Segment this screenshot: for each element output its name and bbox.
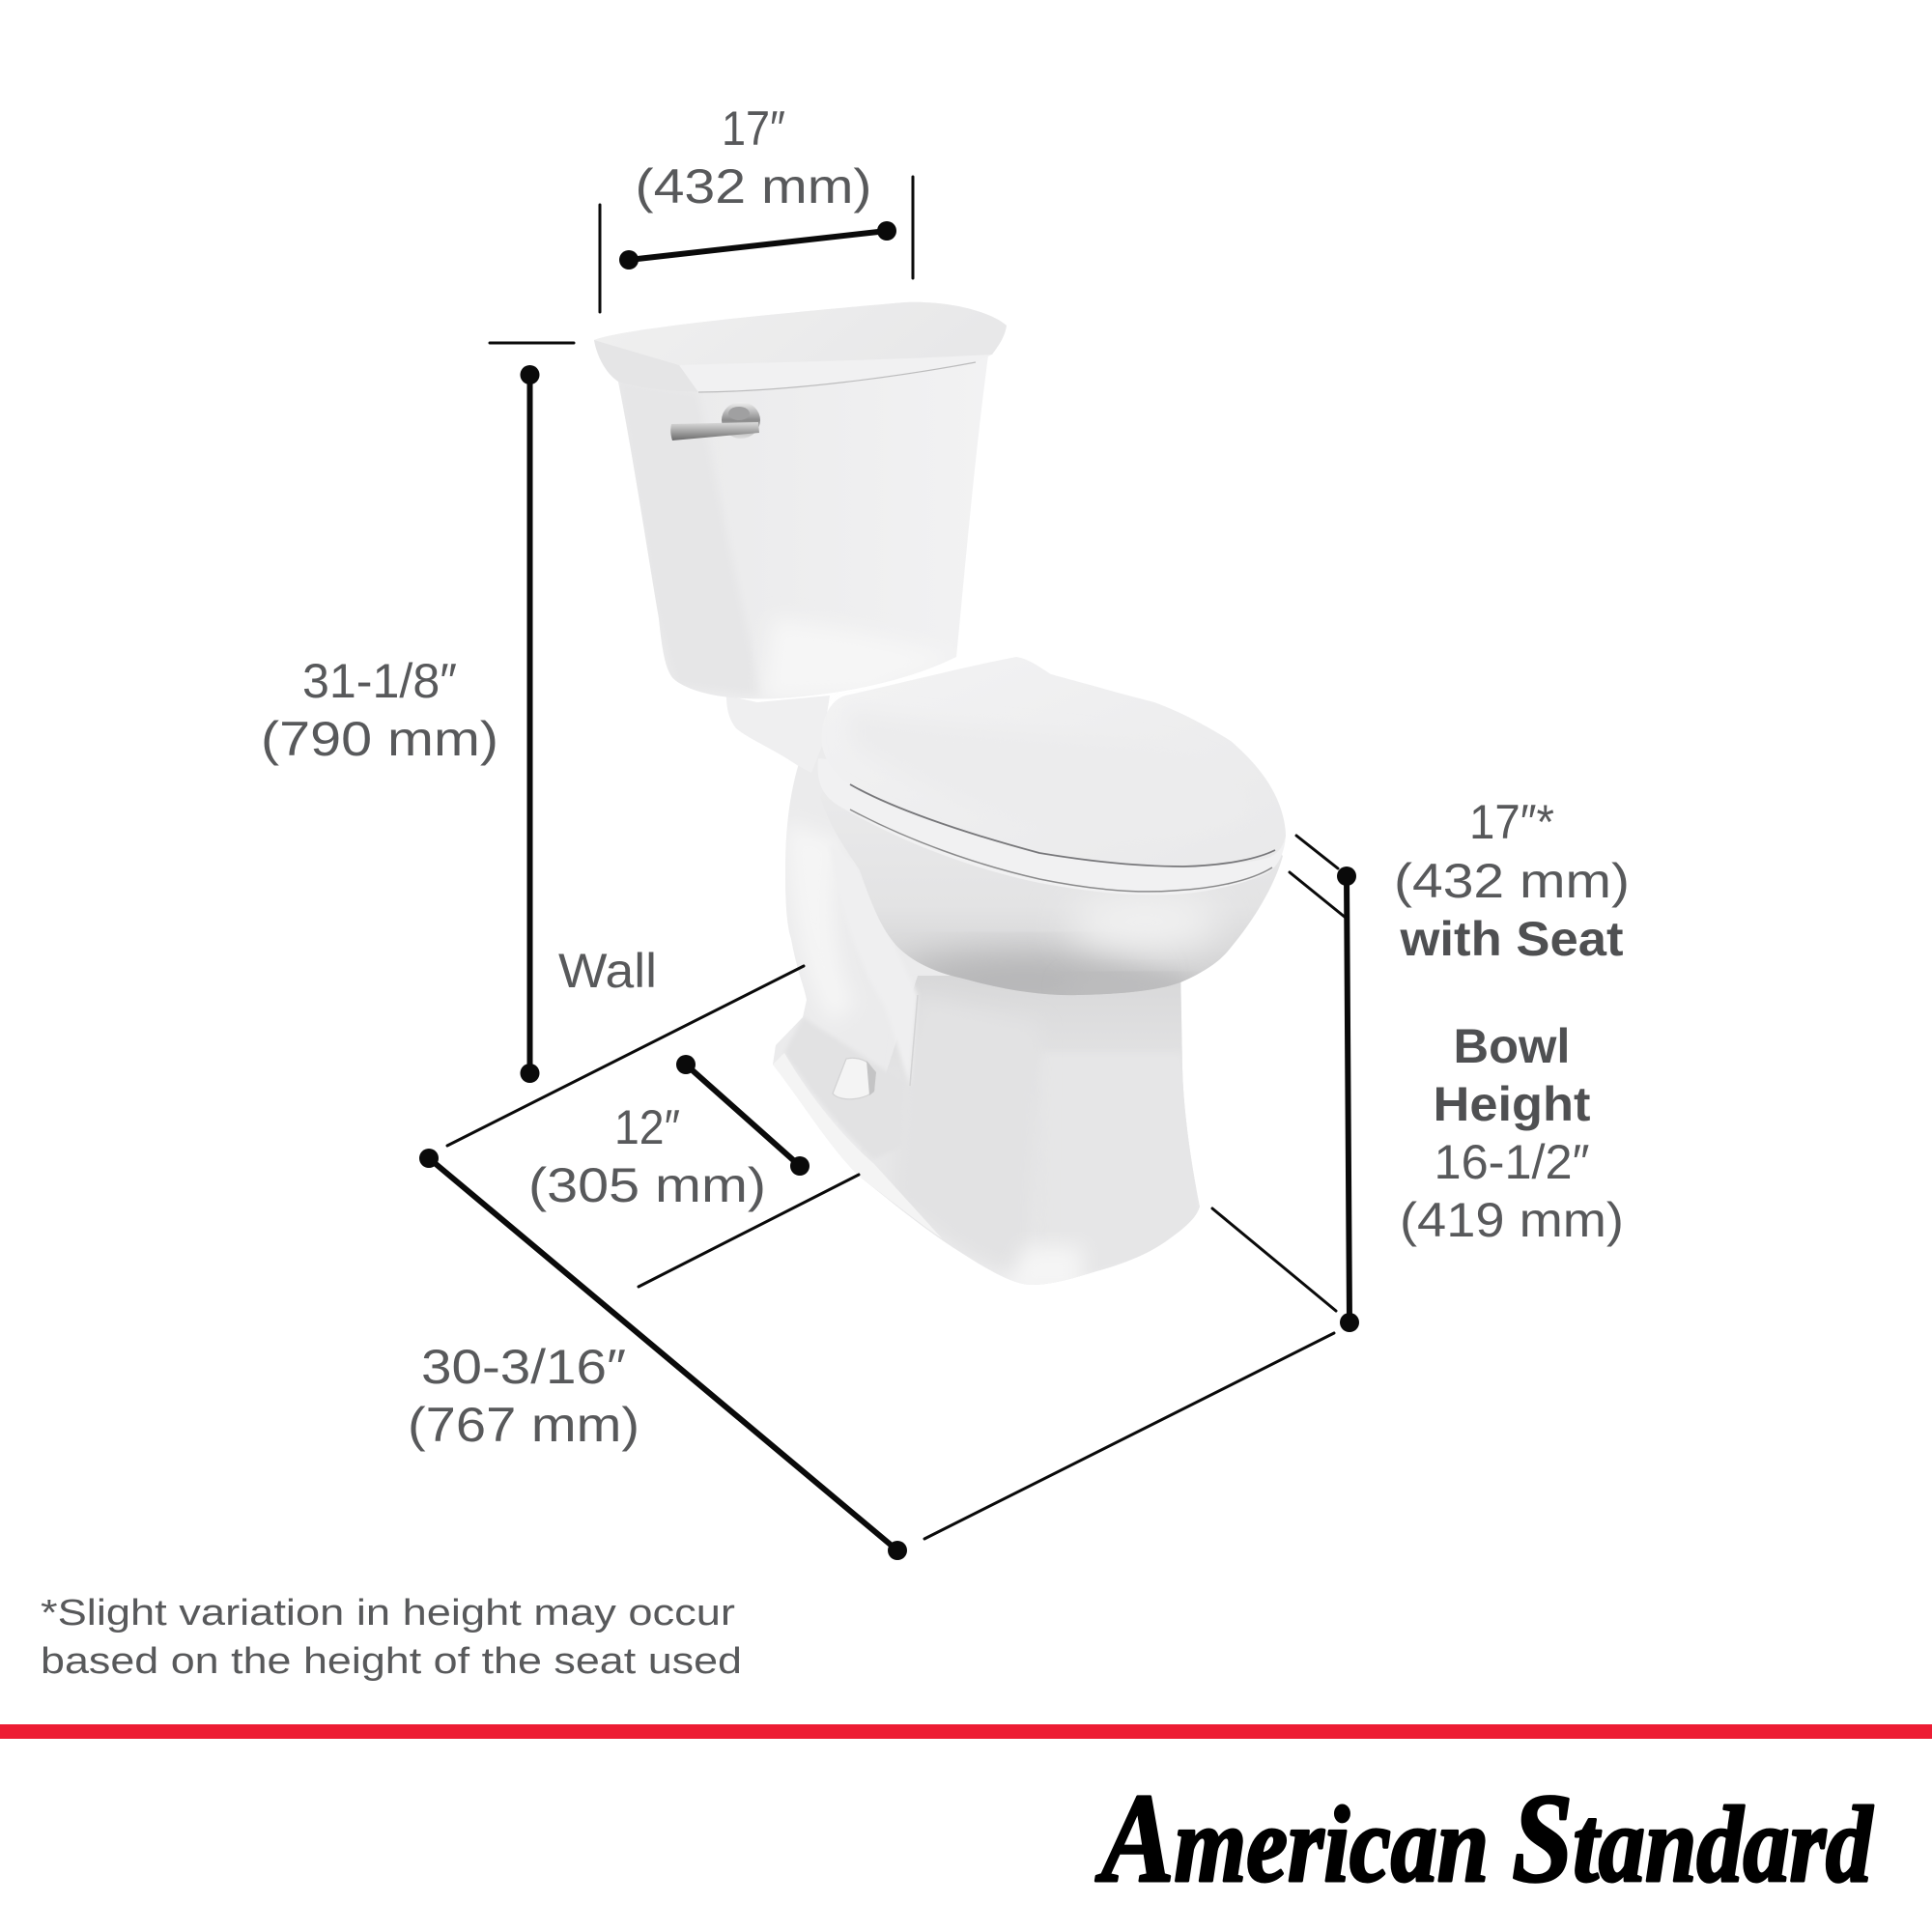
- tank width measure line: [619, 221, 896, 270]
- bowl height labels: 17″*: [1469, 795, 1554, 849]
- seat ring: [818, 758, 1286, 895]
- footnote: based on the height of the seat used: [41, 1641, 742, 1682]
- bowl height labels: Bowl: [1453, 1019, 1571, 1073]
- footnote: *Slight variation in height may occur: [41, 1593, 735, 1634]
- tank width label: [636, 101, 871, 213]
- American Standard logo: American Standard: [1095, 1767, 1874, 1909]
- height label: (790 mm): [261, 712, 498, 766]
- bowl height labels: with Seat: [1399, 912, 1624, 966]
- seat gap shadow: [850, 810, 1272, 892]
- dimension: bowl height: [1212, 795, 1630, 1332]
- bowl height labels: 16-1/2″: [1434, 1135, 1590, 1189]
- bowl height labels: [1394, 795, 1630, 1247]
- rough-in label: (305 mm): [528, 1158, 766, 1212]
- rough-in label: [528, 1100, 766, 1212]
- depth label: (767 mm): [408, 1398, 639, 1452]
- tank width label: (432 mm): [636, 159, 871, 213]
- flush handle: [670, 402, 760, 440]
- rough-in measure line: [676, 1055, 810, 1176]
- bowl height labels: Height: [1434, 1077, 1591, 1131]
- tank width extension lines: [600, 177, 913, 312]
- rough-in label: 12″: [614, 1100, 680, 1154]
- depth label: [408, 1340, 639, 1452]
- toilet base and trapway: [773, 739, 1203, 1294]
- toilet illustration: [594, 302, 1286, 1294]
- footnote: [41, 1593, 742, 1682]
- bowl height measure line: [1337, 867, 1359, 1332]
- tank-to-bowl neck: [726, 696, 830, 773]
- dimension: rough-in 12 in: [528, 1055, 859, 1287]
- tank width label: 17″: [722, 101, 785, 156]
- toilet bowl: [854, 855, 1283, 995]
- seat lid: [822, 657, 1286, 867]
- depth label: 30-3/16″: [421, 1340, 626, 1394]
- dimension: tank width 17 in: [600, 101, 913, 312]
- bowl height labels: (419 mm): [1400, 1193, 1624, 1247]
- height measure line: [520, 365, 539, 1083]
- dimension: overall depth: [408, 1149, 1334, 1560]
- red divider bar: [0, 1724, 1932, 1739]
- dimension: overall height: [261, 343, 574, 1083]
- wall label: Wall: [558, 944, 657, 998]
- tank lid: [594, 302, 1007, 392]
- flush tank body: [618, 355, 988, 700]
- wall line: [447, 966, 804, 1146]
- height label: [261, 654, 498, 766]
- bowl height labels: (432 mm): [1394, 854, 1630, 908]
- depth measure line: [419, 1149, 907, 1560]
- height label: 31-1/8″: [302, 654, 457, 708]
